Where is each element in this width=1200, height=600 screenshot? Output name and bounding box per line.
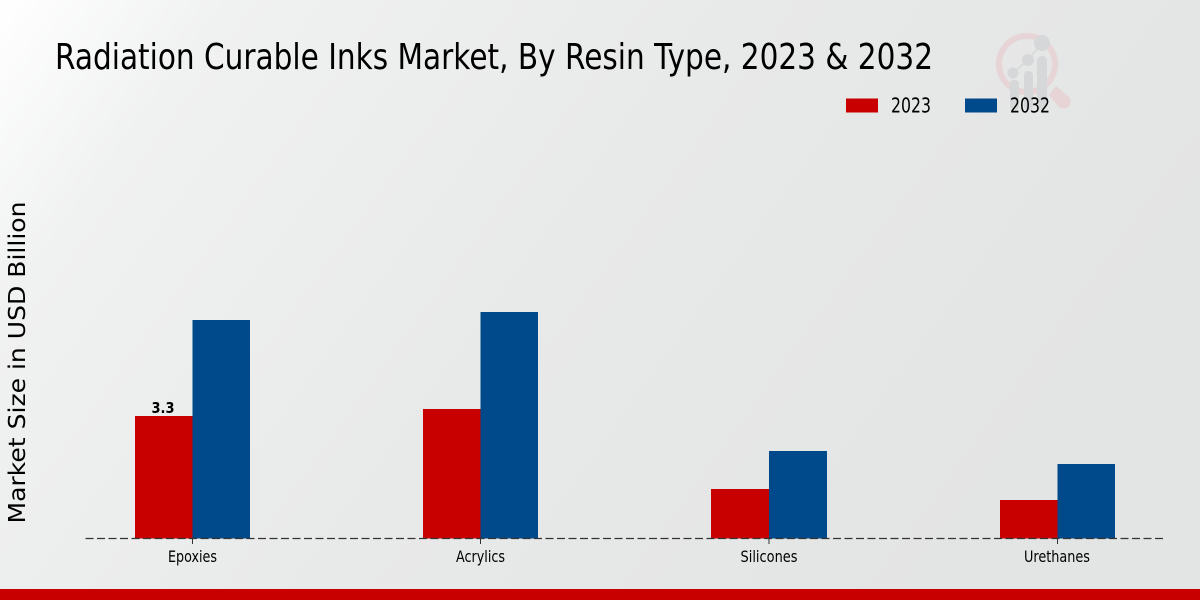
bars: Silicones [711,451,827,538]
footer bar [0,589,1200,600]
category label: Urethanes: Urethanes [1024,547,1090,566]
legend item: 2032 [965,94,1050,118]
bars: Epoxies [135,320,250,538]
value label: 3.3: 3.3 [152,399,174,417]
bar chart [86,312,1165,566]
legend item: 2023: 2023 [891,94,931,118]
y-axis label: Market Size in USD Billion [5,202,31,524]
legend item: 2023 [846,94,931,118]
bars: Acrylics [423,312,538,538]
category label: Acrylics: Acrylics [456,547,505,566]
category label: Epoxies: Epoxies [168,547,217,566]
category label: Silicones: Silicones [740,547,798,566]
title: Radiation Curable Inks Market, By Resin Type, 2023 & 2032 [55,37,933,78]
legend [846,94,1050,118]
bars: Urethanes [1000,464,1115,538]
watermark logo [999,35,1071,110]
legend item: 2032: 2032 [1010,94,1050,118]
